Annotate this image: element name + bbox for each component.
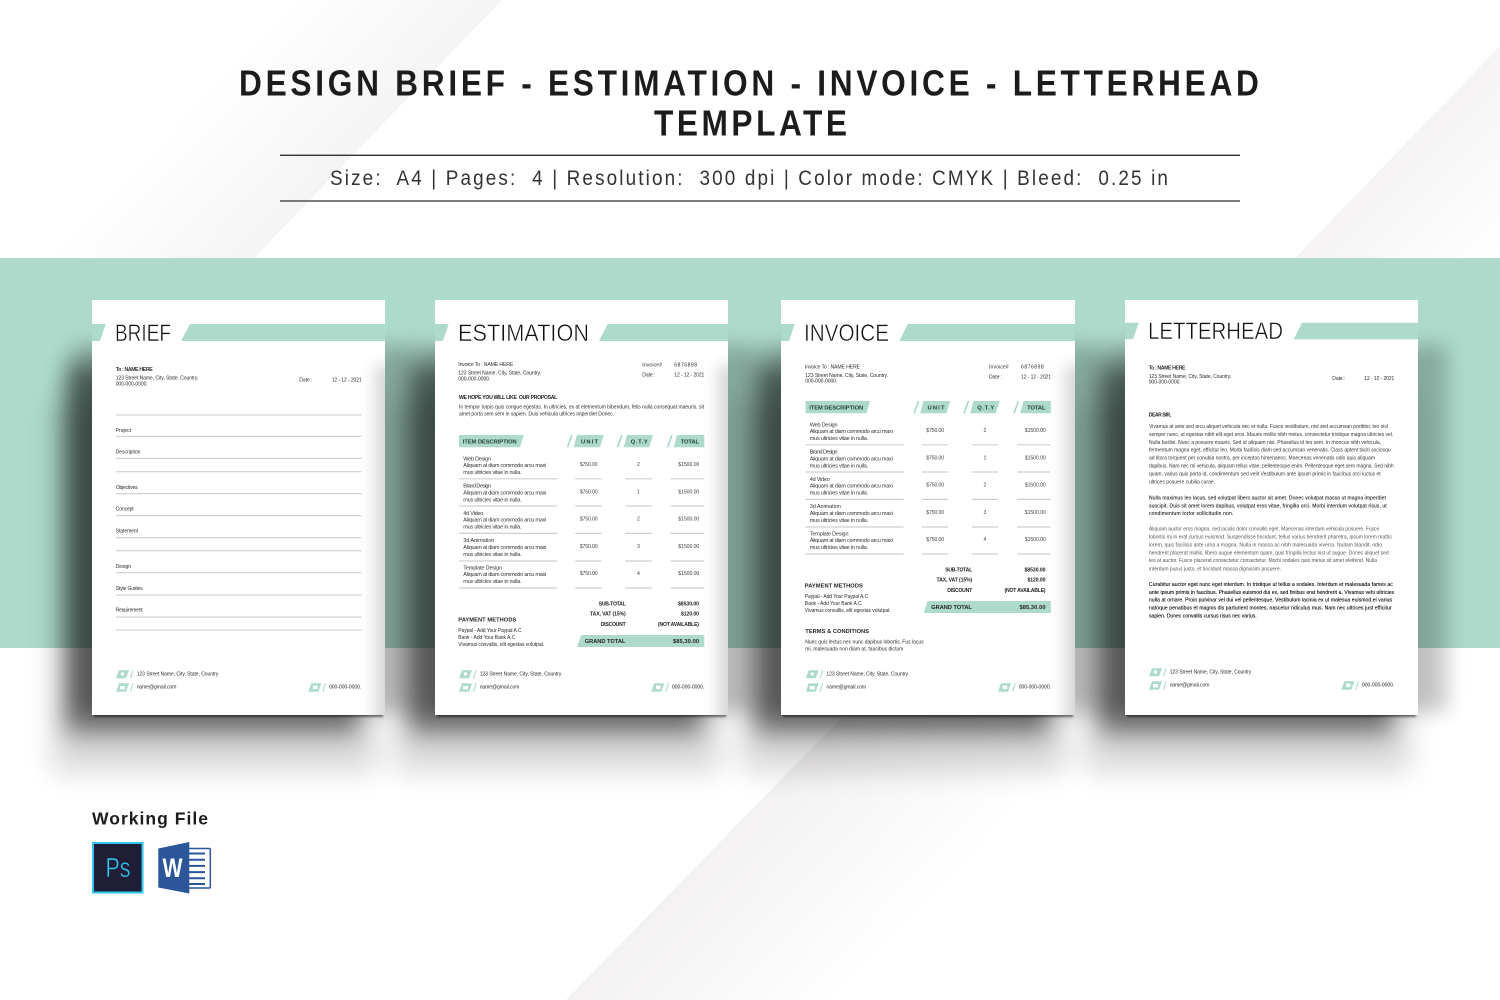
- estimation item table: $1500.00: [678, 544, 699, 550]
- invoice heading: INVOICE: [804, 320, 889, 347]
- invoice footer contacts: 000-000-0000.: [1019, 685, 1051, 691]
- estimation footer contacts: name@gmail.com: [480, 685, 519, 691]
- estimation item table: Brand Design: [463, 484, 491, 490]
- title: DESIGN BRIEF - ESTIMATION - INVOICE - LETTERHEAD: [239, 64, 1259, 104]
- estimation address block: 000-000-0000.: [458, 376, 490, 382]
- letter body text: quam, varius quis porta id, condimentum sed velit Vestibulum ante ipsum primis in faucibus orci luctus et: [1149, 471, 1381, 477]
- brief address block: To : NAME HERE: [116, 367, 153, 373]
- estimation footer contacts: 123 Street Name, City, State, Country: [480, 671, 562, 677]
- invoice item table: $1500.00: [1025, 455, 1046, 461]
- invoice item table: TOTAL: [1027, 405, 1046, 411]
- invoice footer contacts: 123 Street Name, City, State, Country: [826, 671, 909, 677]
- estimation totals: GRAND TOTAL: [585, 639, 626, 645]
- icon: Word: W: [162, 853, 183, 883]
- invoice item table: $750.00: [926, 537, 944, 543]
- invoice item table: mus ultricies vitae in nulla.: [810, 436, 869, 442]
- estimation item table: Aliquam at diam commodo arcu maxi: [463, 518, 546, 524]
- working file heading: Working File: [92, 808, 208, 828]
- invoice item table: 4d Video: [810, 477, 830, 483]
- estimation item table: $750.00: [580, 462, 598, 468]
- letterhead heading: LETTERHEAD: [1148, 318, 1283, 345]
- estimation item table: 1: [637, 489, 640, 495]
- invoice terms and conditions: mi, malesuada non diam at, faucibus dictum: [805, 646, 903, 652]
- invoice footer contacts: name@gmail.com: [826, 685, 866, 691]
- estimation item table: ITEM DESCRIPTION: [463, 439, 517, 445]
- letter body text: suscipit. Duis sit amet lorem dapibus, volutpat eros vitae, fringilla orci. Morbi interdum volutpat risus, ut: [1149, 503, 1387, 509]
- estimation footer contacts: 000-000-0000.: [672, 685, 704, 691]
- letter body text: Curabitur auctor eget nunc eget interdum. In tristique ut tellus a sodales. Interdum et malesuada fames ac: [1149, 582, 1393, 588]
- letter body text: Nulla maximus leo lacus, sed volutpat libero auctor sit amet. Donec volutpat massa ut magna imperdiet: [1149, 495, 1387, 501]
- estimation address block: 123 Street Name, City, State, Country.: [458, 371, 541, 377]
- invoice address block: Invoice#: [989, 365, 1009, 371]
- brief form lines: Objectives: [116, 485, 138, 491]
- brief footer contacts: name@gmail.com: [137, 685, 176, 691]
- brief address block: 123 Street Name, City, State, Country.: [116, 376, 198, 382]
- invoice payment methods: PAYMENT METHODS: [805, 584, 863, 590]
- invoice address block: 000-000-0000.: [805, 379, 837, 385]
- estimation item table: Aliquam at diam commodo arcu maxi: [463, 572, 546, 578]
- card shadows: [52, 345, 1447, 772]
- brief address block: [116, 367, 362, 388]
- title: TEMPLATE: [654, 104, 847, 144]
- invoice address block: 123 Street Name, City, State, Country.: [805, 373, 888, 379]
- letterhead address block: 000-000-0000.: [1149, 380, 1181, 386]
- icon: Photoshop: Ps: [106, 852, 130, 883]
- invoice totals: $120.00: [1028, 578, 1046, 584]
- estimation payment methods: PAYMENT METHODS: [458, 618, 517, 624]
- estimation item table: 2: [637, 517, 640, 523]
- invoice item table: mus ultricies vitae in nulla.: [810, 491, 869, 497]
- letterhead address block: Date :: [1332, 376, 1345, 382]
- invoice totals: DISCOUNT: [947, 588, 973, 594]
- letter body text: ante ipsum primis in faucibus. Phasellus euismod dui ex, sed finibus erat hendrerit a. Vivamus vehi ultricies: [1149, 590, 1394, 596]
- invoice item table: $1500.00: [1025, 428, 1046, 434]
- brief form lines: [116, 414, 362, 631]
- brief address block: Date :: [299, 378, 312, 384]
- estimation item table: 2: [637, 462, 640, 468]
- invoice item table: Aliquam at diam commodo arcu maxi: [810, 511, 893, 517]
- estimation heading: ESTIMATION: [458, 320, 589, 347]
- letter body text: Vivamus at ante sed arcu aliquet vehicula nec et nulla. Fusce vestibulum, nisl sed accumsan porttitor, leo nisl: [1149, 424, 1388, 430]
- estimation proposal text: amet porta sem sem in sapien. Duis vehicula ultrices imperdiet Donec.: [459, 412, 614, 418]
- letterhead footer contacts: 000-000-0000.: [1362, 683, 1394, 689]
- brief form lines: Description: [116, 450, 141, 456]
- invoice totals: (NOT AVAILABLE): [1004, 588, 1046, 594]
- letterhead address block: To : NAME HERE: [1149, 365, 1186, 371]
- invoice address block: 6876898: [1021, 365, 1044, 371]
- invoice totals: $85,30.00: [1020, 605, 1046, 611]
- brief footer contacts: 000-000-0000.: [329, 685, 361, 691]
- invoice item table: [806, 401, 1051, 555]
- invoice payment methods: [805, 584, 891, 614]
- invoice item table: 4: [984, 537, 986, 543]
- icon: Photoshop: [93, 843, 142, 892]
- estimation item table: mus ultricies vitae in nulla.: [463, 470, 522, 476]
- letterhead address block: 12 - 12 - 2021: [1364, 376, 1395, 382]
- invoice payment methods: Vivamus convallis, elit egestas volutpat.: [805, 608, 891, 614]
- estimation item table: Template Design: [463, 566, 502, 572]
- invoice footer contacts: [806, 670, 1051, 692]
- letter body text: condimentum tortor sollicitudin non.: [1149, 511, 1233, 517]
- invoice item table: 2: [984, 483, 986, 489]
- estimation payment methods: [458, 618, 544, 648]
- brief form lines: Statement: [116, 528, 139, 534]
- estimation address block: [458, 362, 705, 382]
- brief address block: 12 - 12 - 2021: [332, 378, 362, 384]
- estimation item table: $750.00: [580, 489, 598, 495]
- estimation item table: TOTAL: [681, 439, 699, 445]
- estimation item table: mus ultricies vitae in nulla.: [463, 552, 522, 558]
- estimation item table: 3d Animation: [463, 538, 494, 544]
- letter body text: fermentum magna eget, efficitur leo. Morbi facilisis diam sed accumsan venenatis. Class aptent taciti sociosqu: [1149, 448, 1391, 454]
- estimation item table: 4d Video: [463, 511, 483, 517]
- estimation proposal text: WE HOPE YOU WILL LIKE OUR PROPOSAL: [459, 395, 557, 401]
- letterhead address block: 123 Street Name, City, State, Country.: [1149, 374, 1231, 380]
- brief form lines: Style Guides: [116, 586, 143, 592]
- estimation item table: mus ultricies vitae in nulla.: [463, 579, 522, 585]
- estimation footer contacts: [459, 670, 704, 692]
- invoice item table: Web Design: [810, 422, 838, 428]
- invoice item table: Aliquam at diam commodo arcu maxi: [810, 429, 893, 435]
- estimation proposal text: [459, 395, 705, 418]
- invoice item table: mus ultricies vitae in nulla.: [810, 463, 869, 469]
- specification line with rules: Size: A4 | Pages: 4 | Resolution: 300 dpi | Color mode: CMYK | Bleed: 0.25 in: [330, 167, 1168, 190]
- invoice item table: mus ultricies vitae in nulla.: [810, 518, 869, 524]
- letter body text: interdum purus justo, et tincidunt massa dignissim posuere.: [1149, 566, 1281, 572]
- invoice item table: Aliquam at diam commodo arcu maxi: [810, 538, 893, 544]
- invoice item table: ITEM DESCRIPTION: [809, 405, 863, 411]
- invoice item table: $750.00: [926, 455, 944, 461]
- estimation payment methods: Bank - Add Your Bank A.C: [458, 635, 516, 641]
- invoice item table: $1500.00: [1025, 510, 1046, 516]
- invoice item table: Aliquam at diam commodo arcu maxi: [810, 456, 893, 462]
- invoice item table: UNIT: [928, 405, 945, 411]
- estimation totals: SUB-TOTAL: [599, 602, 626, 608]
- estimation totals: DISCOUNT: [601, 622, 627, 628]
- invoice totals: GRAND TOTAL: [931, 605, 972, 611]
- brief form lines: Project: [116, 428, 132, 434]
- invoice item table: $750.00: [926, 428, 944, 434]
- estimation item table: $1500.00: [678, 571, 699, 577]
- estimation item table: mus ultricies vitae in nulla.: [463, 497, 522, 503]
- invoice totals: TAX, VAT (15%): [936, 578, 972, 584]
- estimation item table: Web Design: [463, 456, 491, 462]
- estimation item table: Aliquam at diam commodo arcu maxi: [463, 463, 546, 469]
- title: [239, 64, 1259, 144]
- estimation totals: $85,30.00: [673, 639, 699, 645]
- invoice item table: 3d Animation: [810, 504, 841, 510]
- estimation item table: $750.00: [580, 544, 598, 550]
- letter body text: leo at auctor. Fusce placerat consectetur consectetur. Morbi sodales quis metus sit amet eleifend. Nulla: [1149, 558, 1377, 564]
- letter body text: [1149, 412, 1394, 619]
- estimation totals: $8530.00: [678, 602, 699, 608]
- panel: brief page: [92, 300, 385, 715]
- invoice item table: Q.T.Y: [977, 405, 994, 411]
- estimation item table: 3: [637, 544, 640, 550]
- invoice payment methods: Paypal - Add Your Paypal A.C: [805, 594, 868, 600]
- invoice payment methods: Bank - Add Your Bank A.C: [805, 601, 862, 607]
- estimation item table: Aliquam at diam commodo arcu maxi: [463, 545, 546, 551]
- panel: estimation page: [435, 300, 728, 715]
- estimation item table: [459, 435, 704, 589]
- invoice address block: Invoice To : NAME HERE: [805, 364, 861, 370]
- invoice address block: Date :: [989, 375, 1002, 381]
- estimation address block: 12 - 12 - 2021: [674, 372, 705, 378]
- letter body text: Nulla facilisi. Nunc a posuere mauris. Sed id aliquam nisl. Phasellus id leo sem. In rhoncus nibh vehicula,: [1149, 440, 1381, 446]
- estimation proposal text: In tempor turpis quis congue egestas. In ultricies, ex at elementum bibendum, felis nulla consequat maeuris, sit: [459, 405, 705, 411]
- brief address block: 000-000-0000.: [116, 382, 148, 388]
- brief footer contacts: [116, 670, 361, 692]
- estimation totals: TAX, VAT (15%): [590, 612, 626, 618]
- estimation item table: Q.T.Y: [631, 439, 648, 445]
- estimation item table: UNIT: [581, 439, 598, 445]
- estimation item table: $750.00: [580, 517, 598, 523]
- brief heading: BRIEF: [115, 320, 171, 347]
- letter body text: hendrerit placerat mollis, libero augue elementum quam, quis fringilla lectus nisl ut augue. Donec aliquet sed: [1149, 550, 1389, 556]
- invoice totals: [924, 568, 1051, 613]
- panel: invoice page: [781, 300, 1075, 715]
- letterhead footer contacts: 123 Street Name, City, State, Country: [1170, 669, 1252, 675]
- invoice address block: 12 - 12 - 2021: [1021, 375, 1051, 381]
- invoice terms and conditions: Nunc quis lectus nec nunc dapibus lobortis. Fus lacus: [805, 639, 924, 645]
- invoice totals: SUB-TOTAL: [945, 568, 972, 574]
- letterhead address block: [1149, 365, 1395, 386]
- invoice terms and conditions: [805, 629, 924, 652]
- estimation item table: Aliquam at diam commodo arcu maxi: [463, 490, 546, 496]
- invoice item table: $750.00: [926, 510, 944, 516]
- invoice item table: Brand Design: [810, 450, 838, 456]
- brief form lines: Design: [116, 564, 131, 570]
- letter body text: DEAR SIR,: [1149, 412, 1172, 418]
- letter body text: dapibus. Nam nec mi vehicula, aliquam tellus vitae, pellentesque enim. Pellentesque eget sem magna. Sed nibh: [1149, 464, 1394, 470]
- estimation payment methods: Paypal - Add Your Paypal A.C: [458, 628, 522, 634]
- letter body text: natoque penatibus et magnis dis parturient montes, nascetur ridiculus mus. Nam nec ultrices just efficitur: [1149, 605, 1392, 611]
- invoice item table: $1500.00: [1025, 483, 1046, 489]
- letter body text: semper nunc, ut egestas nibh elit eget eros. Mauris mollis nibh metus, consectetur tristique magna ultricies vel.: [1149, 432, 1393, 438]
- estimation totals: (NOT AVAILABLE): [658, 622, 699, 628]
- icon: Word: [158, 842, 210, 894]
- mint background band: [0, 258, 1500, 648]
- estimation address block: Invoice To : NAME HERE: [458, 362, 514, 368]
- invoice item table: Aliquam at diam commodo arcu maxi: [810, 484, 893, 490]
- panel: letterhead page: [1125, 300, 1418, 715]
- brief form lines: Concept: [116, 507, 134, 513]
- invoice item table: Template Design: [810, 532, 848, 538]
- invoice address block: [805, 364, 1051, 385]
- estimation address block: 6876898: [674, 362, 697, 368]
- invoice item table: 2: [984, 428, 986, 434]
- invoice item table: $1500.00: [1025, 537, 1046, 543]
- letterhead footer contacts: name@gmail.com: [1170, 683, 1209, 689]
- estimation item table: mus ultricies vitae in nulla.: [463, 525, 522, 531]
- letter body text: nulla at ornare. Proin pulvinar vel dui vel pellentesque. Vestibulum lacinia ex ut malesua euismod.ei varius: [1149, 598, 1392, 604]
- estimation item table: 4: [637, 571, 640, 577]
- estimation item table: $750.00: [580, 571, 598, 577]
- estimation item table: $1500.00: [678, 489, 699, 495]
- letterhead footer contacts: [1149, 668, 1394, 690]
- estimation address block: Invoice#: [642, 362, 662, 368]
- letter body text: lobortis mi in erat cursus euismod. Suspendisse tincidunt, tellus varius hendrerit pharetra, ipsum lorem mattis: [1149, 535, 1392, 541]
- estimation item table: $1500.00: [678, 462, 699, 468]
- brief footer contacts: 123 Street Name, City, State, Country: [137, 671, 219, 677]
- estimation totals: [577, 602, 704, 647]
- invoice terms and conditions: TERMS & CONDITIONS: [805, 629, 869, 635]
- letter body text: ad litora torquent per conubia nostra, per inceptos himenaeos. Maecenas venenatis odio quis aliquam: [1149, 456, 1375, 462]
- estimation item table: $1500.00: [678, 517, 699, 523]
- invoice item table: mus ultricies vitae in nulla.: [810, 545, 869, 551]
- invoice item table: 1: [984, 455, 986, 461]
- letter body text: Aliquam auctor eros magna, sed iaculis dolor convallis eget. Maecenas interdum vehicula posuere. Fusce: [1149, 527, 1380, 533]
- invoice totals: $8530.00: [1024, 568, 1046, 574]
- letter body text: ultrices posuere cubilia curae.: [1149, 479, 1215, 485]
- brief form lines: Requirement: [116, 608, 143, 614]
- invoice item table: 3: [984, 510, 986, 516]
- letter body text: lorem, quis facilisis ante urna a magna. Nulla in massa ac nibh malesuada viverra. Nullam blandit, odio: [1149, 542, 1382, 548]
- invoice item table: $750.00: [926, 483, 944, 489]
- letter body text: sapien. Donec convallis cursus risus nec varius.: [1149, 613, 1257, 619]
- estimation payment methods: Vivamus convallis, elit egestas volutpat.: [458, 642, 544, 648]
- estimation address block: Date :: [642, 372, 655, 378]
- estimation totals: $120.00: [681, 612, 699, 618]
